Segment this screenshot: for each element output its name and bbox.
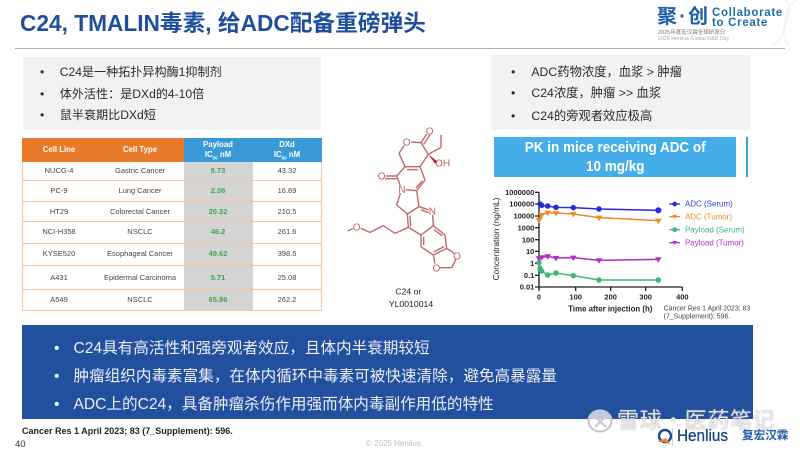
company logo: Henlius [677,426,728,445]
bullet text 1: • C24是一种拓扑异构酶1抑制剂 [40,65,222,79]
table: IC50 values: 8.73 [211,166,225,175]
chemical structure: C24: O [378,172,386,183]
y axis labels: 1000 [518,223,534,232]
table: IC50 values: IC50 nM [205,150,231,161]
chart citation: Cancer Res 1 April 2023; 83 [664,305,750,312]
table: IC50 values: Cell Line [43,145,75,154]
table: IC50 values: 2.06 [211,186,225,195]
table: IC50 values: DXd [279,140,295,149]
table: IC50 values: 65.86 [209,295,227,304]
event logo: 聚·创 [657,6,710,28]
table: IC50 values: NSCLC [127,295,153,304]
x axis labels: 300 [639,293,652,302]
table: IC50 values: 43.32 [278,166,296,175]
table: IC50 values: 5.71 [211,273,225,282]
chart heading: 10 mg/kg [586,159,644,175]
table: IC50 values: 398.5 [278,249,296,258]
series: payload serum [537,261,660,282]
y axis title: Concentration (ng/mL) [491,197,501,280]
conclusion 2: • 肿瘤组织内毒素富集，在体内循环中毒素可被快速清除，避免高暴露量 [54,368,557,385]
event logo [657,6,783,42]
chart axes [535,192,682,291]
chemical structure: C24: O [403,137,411,148]
y axis labels: 0.01 [520,283,534,292]
title: C24, TMALIN毒素, 给ADC配备重磅弹头 [20,10,426,36]
table: IC50 values: Payload [203,140,233,149]
chemical structure: C24: O [453,251,461,262]
table header: payload and DXd [184,138,322,162]
event logo: Collaborate [712,7,783,19]
y axis labels: 100 [522,235,534,244]
event logo: 2025 Henlius Global R&D Day [658,36,729,42]
table: IC50 values: Colorectal Cancer [110,207,170,216]
table: IC50 values: 25.08 [278,273,296,282]
bullet text 2: • C24浓度，肿瘤 >> 血浆 [511,86,661,100]
accent line [746,137,748,177]
table: IC50 values: Cell Type [123,145,157,154]
chemical structure: C24: N [429,207,436,218]
bullet text 2: • 体外活性：是DXd的4-10倍 [40,87,204,101]
x axis title: Time after injection (h) [568,304,653,313]
legend: Payload (Serum) [685,225,745,234]
chemical structure: C24: O [432,263,440,274]
icon: watermark mark [588,409,612,433]
table: IC50 values: HT29 [50,207,68,216]
bullet text 3: • C24的旁观者效应极高 [511,109,652,123]
table: IC50 values: Gastric Cancer [115,166,165,175]
table: IC50 values: PC-9 [50,186,68,195]
y axis labels: 100000 [509,200,534,209]
bullet text 1: • ADC药物浓度，血浆 > 肿瘤 [511,65,682,79]
y axis labels: 1000000 [505,188,534,197]
x axis labels: 200 [604,293,617,302]
chart heading [494,137,736,177]
table: IC50 values: 262.2 [278,295,296,304]
chemical structure: C24: O [426,126,434,137]
table: IC50 values: Esophageal Cancer [107,249,173,258]
watermark: 雪球・医药笔记 [617,408,775,433]
bullet text 3: • 鼠半衰期比DXd短 [40,108,156,122]
series: ADC tumor [537,211,660,223]
table: IC50 values: NUCG-4 [45,166,73,175]
chemical structure: C24 [347,126,461,309]
chart heading: PK in mice receiving ADC of [525,140,705,156]
logo divider [672,428,673,446]
table: IC50 values: KYSE520 [43,249,75,258]
panel: conclusions [22,325,753,419]
table: IC50 values: 210.5 [278,207,296,216]
x axis labels: 100 [569,293,582,302]
y axis labels: 10 [526,247,534,256]
company logo [657,426,788,446]
table: IC50 values: 261.6 [278,227,296,236]
header divider [15,48,785,49]
table: IC50 values: Epidermal Carcinoma [104,273,176,282]
event logo: 2025年度宏汉霖全球研发日 [658,30,725,36]
x axis labels: 400 [676,293,689,302]
table header: cell line and type [22,138,184,162]
table: IC50 values: 49.62 [209,249,227,258]
event logo: to Create [712,17,768,29]
y axis labels: 1 [530,259,534,268]
chemical structure: C24: OH [435,158,450,169]
y axis labels: 0.1 [524,271,534,280]
table: IC50 values: 16.69 [278,186,296,195]
legend: ADC (Serum) [685,200,733,209]
table: IC50 values: A431 [50,273,68,282]
icon: logo mark [657,428,672,445]
citation: Cancer Res 1 April 2023; 83 (7_Supplement): 596. [22,426,233,436]
table: IC50 values: NCI-H358 [42,227,76,236]
table: IC50 values: 20.32 [209,207,227,216]
copyright: © 2025 Henlius. [366,439,423,448]
series: payload tumor [537,255,660,262]
series: ADC serum [538,202,661,213]
table: IC50 values: Lung Cancer [119,186,161,195]
x axis labels: 0 [537,293,541,302]
table: IC50 values: NSCLC [127,227,153,236]
y axis labels [505,188,534,292]
chemical structure: C24: O [353,222,361,233]
company logo: 复宏汉霖 [742,429,788,442]
page number: 40 [15,439,26,450]
table: IC50 values [22,138,322,311]
wedge bond [428,154,438,164]
panel: C24 properties [23,57,321,130]
table: IC50 values: IC50 nM [274,150,300,161]
table: IC50 values: A549 [50,295,68,304]
table: IC50 values: 46.2 [211,227,225,236]
legend [669,200,745,247]
chemical structure: C24: N [398,185,406,196]
y axis labels: 10000 [513,212,534,221]
chemical structure: C24: YL0010014 [389,299,433,309]
panel: PK findings [491,55,750,130]
chart citation: (7_Supplement): 596. [664,313,730,320]
legend: ADC (Tumor) [685,213,732,222]
legend: Payload (Tumor) [685,238,744,247]
icon: DNA decoration [773,0,798,46]
conclusion 3: • ADC上的C24，具备肿瘤杀伤作用强而体内毒副作用低的特性 [54,396,494,413]
line chart: PK concentrations [491,188,750,320]
chemical structure: C24: C24 or [395,286,421,296]
conclusion 1: • C24具有高活性和强旁观者效应，且体内半衰期较短 [54,340,430,357]
x axis labels [537,293,689,302]
payload column shading [184,162,253,311]
